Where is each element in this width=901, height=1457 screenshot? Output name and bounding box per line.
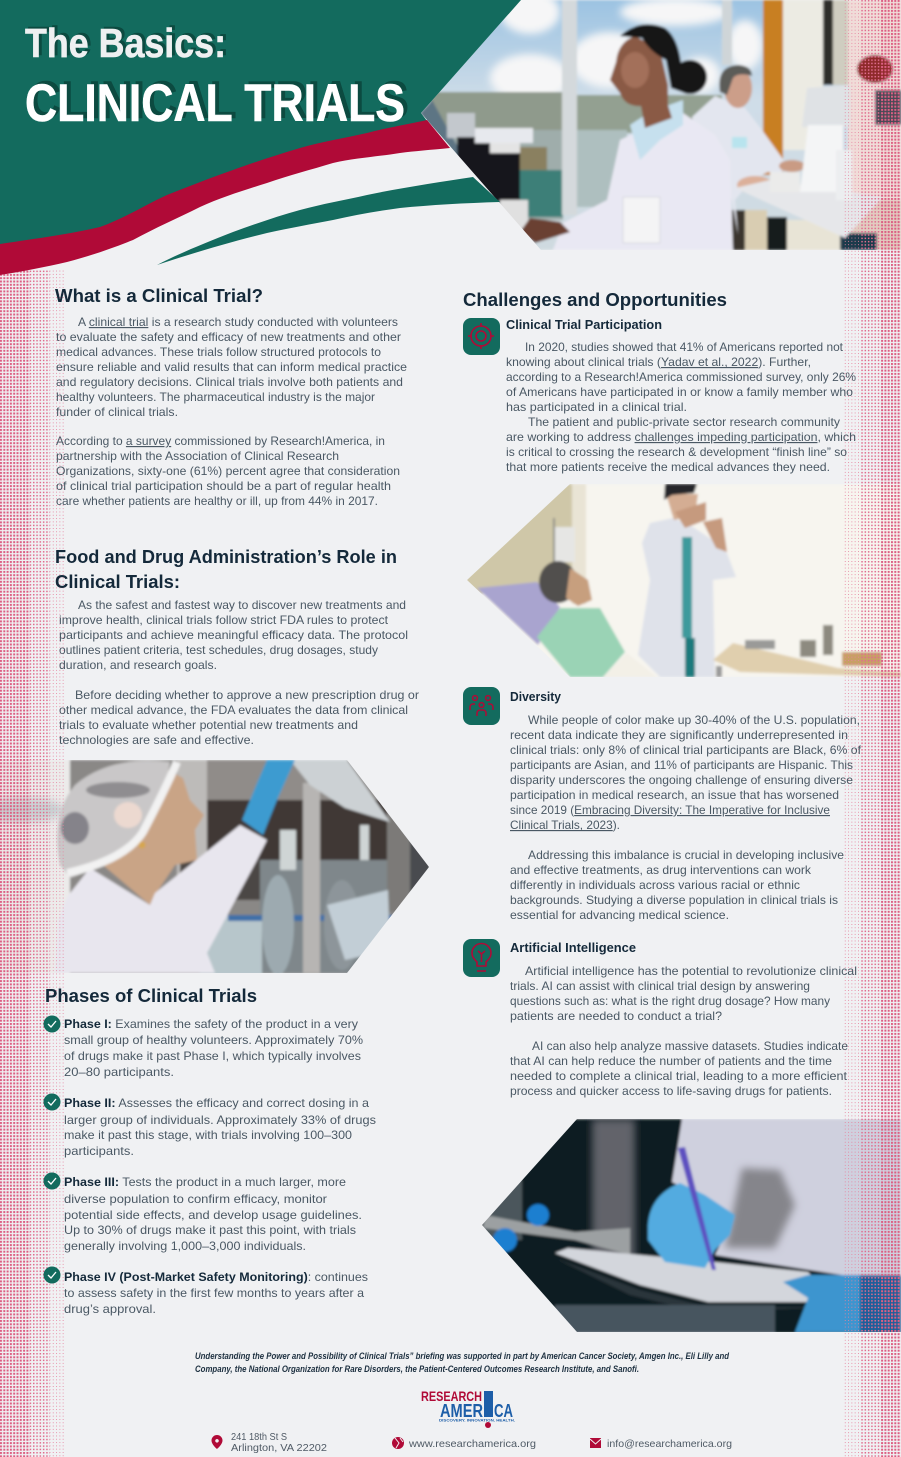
text block: diversity: Addressing this imbalance is crucial in developing inclusive [528, 849, 844, 862]
logo: Research!America: DISCOVERY. INNOVATION. HEALTH. [439, 1418, 515, 1422]
footer: sponsor note: Company, the National Organization for Rare Disorders, the Patient-Centered Outcomes Research Institute, and Sanofi. [195, 1364, 639, 1374]
text block: what is a clinical trial: partnership with the Association of Clinical Research [56, 450, 339, 463]
header: green panel [0, 0, 521, 250]
text block: what is a clinical trial: medical advances. These trials follow structured protocols to [56, 346, 381, 359]
heading: Challenges and Opportunities: Challenges and Opportunities [463, 290, 727, 310]
phase II: Phase II: Assesses the efficacy and correct dosing in a [64, 1097, 370, 1110]
subheading: clinical trial participation: Clinical Trial Participation [506, 318, 662, 332]
text block: participation: according to a Research!America commissioned survey, only 26% [506, 371, 856, 384]
icon: check [44, 1266, 60, 1284]
heading: FDA role: Food and Drug Administration’s Role in [55, 547, 397, 567]
phase list [44, 1016, 376, 1316]
text block: FDA role [59, 599, 419, 747]
text block: participation: In 2020, studies showed that 41% of Americans reported not [525, 341, 844, 354]
icon: people [463, 687, 500, 725]
logo: Research!America: CA [494, 1401, 513, 1421]
text block: FDA role: trials to evaluate whether potential new treatments and [59, 719, 358, 732]
footer: address: Arlington, VA 22202 [231, 1442, 327, 1454]
photo: gloved hand writing on clipboard [481, 1119, 901, 1333]
footer: address: 241 18th St S [231, 1431, 287, 1443]
text block: participation: that more patients receive the medical advances they need. [506, 461, 830, 474]
phase I: Phase I: Examines the safety of the product in a very [64, 1018, 358, 1031]
title [25, 18, 409, 133]
footer: email: info@researchamerica.org [607, 1438, 732, 1450]
phase II: participants. [64, 1145, 134, 1158]
icon: check [44, 1172, 60, 1190]
text block: FDA role: improve health, clinical trials follow strict FDA rules to protect [59, 614, 389, 627]
phase IV: drug’s approval. [64, 1303, 156, 1316]
icon: check [44, 1094, 60, 1110]
text block: diversity: differently in individuals across various racial or ethnic [510, 879, 800, 892]
text block: diversity: clinical trials: only 8% of clinical trial participants are Black, 6% of [510, 744, 862, 757]
phase III: Up to 30% of drugs make it past this point, with trials [64, 1224, 356, 1237]
desk items left [421, 100, 460, 156]
text block: diversity [510, 714, 862, 922]
footer: address [212, 1431, 327, 1454]
woman [553, 113, 733, 250]
header: crimson swoosh [0, 120, 450, 275]
phase II [44, 1094, 376, 1158]
phase I: 20–80 participants. [64, 1066, 174, 1079]
text block: participation [506, 341, 856, 474]
photo: doctor and patient [466, 484, 901, 677]
title text [25, 20, 405, 133]
text block: artificial intelligence: questions such as: what is the right drug dosage? How many [510, 995, 830, 1008]
text block: artificial intelligence: AI can also help analyze massive datasets. Studies indicate [532, 1040, 848, 1053]
text block: what is a clinical trial: funder of clinical trials. [56, 406, 178, 419]
text block: FDA role: technologies are safe and effective. [59, 734, 254, 747]
text block: participation: The patient and public-private sector research community [528, 416, 840, 429]
phase IV: Phase IV (Post-Market Safety Monitoring) : continues [64, 1271, 368, 1284]
text block: FDA role: As the safest and fastest way to discover new treatments and [78, 599, 406, 612]
phase II: larger group of individuals. Approximately 33% of drugs [64, 1114, 376, 1127]
text block: artificial intelligence: process and quicker access to life-saving drugs for patients. [510, 1085, 832, 1098]
subheading: diversity: Diversity [510, 690, 561, 704]
heading: What is a Clinical Trial: What is a Clinical Trial? [55, 286, 263, 306]
text block: participation: has participated in a clinical trial. [506, 401, 687, 414]
text block: diversity: backgrounds. Studying a diverse population in clinical trials is [510, 894, 838, 907]
title shadow [28, 18, 409, 130]
title text: The Basics: [25, 20, 226, 66]
text block: FDA role: other medical advance, the FDA evaluates the data from clinical [59, 704, 408, 717]
halftone band: right [843, 0, 901, 1457]
phase III: generally involving 1,000–3,000 individuals. [64, 1240, 306, 1253]
text block: FDA role: Before deciding whether to approve a new prescription drug or [75, 689, 419, 702]
text block: artificial intelligence [510, 965, 857, 1098]
text block: diversity: since 2019 (Embracing Diversity: The Imperative for Inclusive [510, 804, 830, 817]
text block: artificial intelligence: needed to complete a clinical trial, leading to a more efficient [510, 1070, 848, 1083]
title text: CLINICAL TRIALS [25, 74, 405, 133]
text block: what is a clinical trial: ensure reliable and valid results that can inform medical practice [56, 361, 407, 374]
text block: what is a clinical trial: Organizations, sixty-one (61%) percent agree that consideration [56, 465, 400, 478]
text block: diversity: recent data indicate they are significantly underrepresented in [510, 729, 848, 742]
icon: globe [392, 1437, 404, 1449]
text block: participation: is critical to crossing the research & development “finish line” so [506, 446, 847, 459]
text block: what is a clinical trial: to evaluate the safety and efficacy of new treatments and other [56, 331, 401, 344]
text block: diversity: essential for advancing medical science. [510, 909, 729, 922]
text block: artificial intelligence: that AI can help reduce the number of patients and the time [510, 1055, 832, 1068]
icon: map pin [212, 1435, 222, 1449]
heading: FDA role [55, 547, 397, 592]
text block: diversity: disparity underscores the ongoing challenge of ensuring diverse [510, 774, 853, 787]
text block: diversity: participation in medical research, an issue that has worsened [510, 789, 839, 802]
icon: envelope [590, 1438, 601, 1448]
phase IV [44, 1266, 368, 1316]
footer: website: www.researchamerica.org [408, 1438, 536, 1450]
text block: FDA role: duration, and research goals. [59, 659, 217, 672]
phase II: make it past this stage, with trials involving 100–300 [64, 1129, 352, 1142]
text block: artificial intelligence: trials. AI can assist with clinical trial design by answering [510, 980, 810, 993]
phase III: potential side effects, and develop usage guidelines. [64, 1209, 362, 1222]
text block: FDA role: outlines patient criteria, test schedules, drug dosages, study [59, 644, 378, 657]
icon: check [44, 1016, 60, 1032]
title shadow: The Basics: [28, 18, 229, 64]
header: green swoosh [157, 177, 500, 265]
photo: two researchers at computers [420, 0, 901, 250]
text block: artificial intelligence: patients are needed to conduct a trial? [510, 1010, 723, 1023]
heading: Phases of Clinical Trials: Phases of Clinical Trials [45, 986, 257, 1006]
desk and monitors [735, 180, 883, 238]
logo: Research!America: RESEARCH [421, 1388, 482, 1404]
footer: sponsor note [195, 1351, 729, 1374]
phase III: diverse population to confirm efficacy, monitor [64, 1193, 327, 1206]
text block: what is a clinical trial: According to a survey commissioned by Research!America, in [56, 435, 385, 448]
text block: FDA role: participants and achieve meaningful efficacy data. The protocol [59, 629, 408, 642]
text block: diversity: While people of color make up 30-40% of the U.S. population, [528, 714, 860, 727]
photo: lab scientist with bottles [0, 760, 430, 975]
phase III [44, 1172, 362, 1253]
phase III: Phase III: Tests the product in a much larger, more [64, 1176, 346, 1189]
text block: artificial intelligence: Artificial intelligence has the potential to revolutionize clinical [525, 965, 857, 978]
text block: what is a clinical trial: and regulatory decisions. Clinical trials involve both patients and [56, 376, 403, 389]
text block: what is a clinical trial: of clinical trial participation should be a part of regular health [56, 480, 391, 493]
man [692, 96, 785, 235]
text block: diversity: Clinical Trials, 2023). [510, 819, 620, 832]
text block: diversity: participants are Asian, and 11% of participants are Hispanic. This [510, 759, 853, 772]
logo: Research!America: AMER [440, 1401, 483, 1421]
text block: what is a clinical trial: healthy volunteers. The pharmaceutical industry is the major [56, 391, 375, 404]
text block: participation: are working to address challenges impeding participation , which [506, 431, 856, 444]
text block: what is a clinical trial: A clinical trial is a research study conducted with volunteers [78, 316, 398, 329]
logo: Research!America [421, 1388, 515, 1428]
subheading: artificial intelligence: Artificial Intelligence [510, 941, 636, 955]
footer: sponsor note: Understanding the Power and Possibility of Clinical Trials” briefing was supported in part by American Cancer Society, Amgen Inc., Eli Lilly and [195, 1351, 729, 1361]
phase IV: to assess safety in the first few months to years after a [64, 1287, 365, 1300]
text block: what is a clinical trial: care whether patients are healthy or ill, up from 44% in 2017. [56, 495, 378, 508]
title shadow: CLINICAL TRIALS [29, 71, 409, 130]
text block: participation: of Americans have participated in or know a family member who [506, 386, 853, 399]
phase I: of drugs make it past Phase I, which typically involves [64, 1050, 361, 1063]
text block: participation: knowing about clinical trials ( Yadav et al., 2022 ). Further, [506, 356, 811, 369]
halftone band: left [0, 270, 66, 1457]
phase I [44, 1016, 363, 1079]
icon: lightbulb [463, 939, 500, 977]
icon: target [463, 318, 500, 355]
under desk [743, 210, 767, 250]
phase I: small group of healthy volunteers. Approximately 70% [64, 1034, 363, 1047]
heading: FDA role: Clinical Trials: [55, 572, 180, 592]
text block: what is a clinical trial [56, 316, 407, 508]
text block: diversity: and effective treatments, as drug interventions can work [510, 864, 811, 877]
